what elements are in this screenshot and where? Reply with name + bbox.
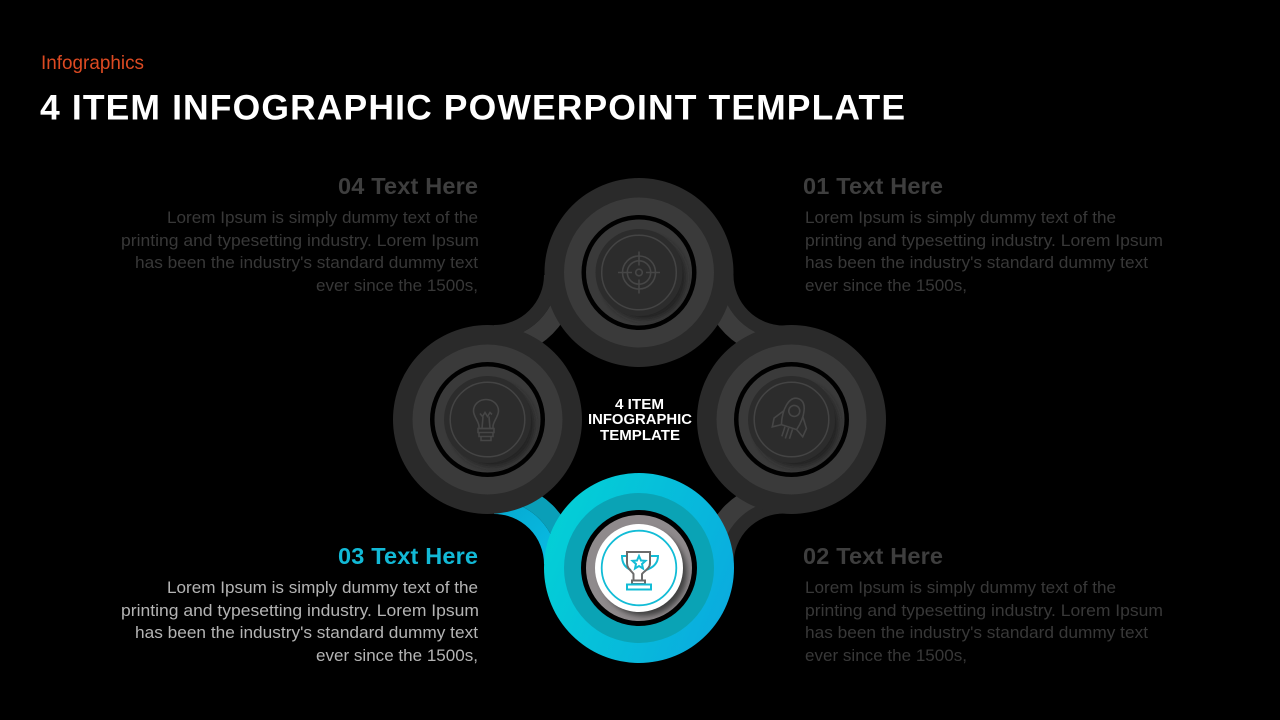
text block 02: printing and typesetting industry. Lorem Ipsum <box>805 601 1163 620</box>
text block 01: printing and typesetting industry. Lorem Ipsum <box>805 231 1163 250</box>
centre label <box>588 397 693 444</box>
connector: top to right <box>710 275 784 348</box>
connector: left to bottom (highlighted) <box>494 490 568 564</box>
node 03: trophy (active) <box>544 473 734 663</box>
text block 03 (active): has been the industry's standard dummy text <box>135 623 478 642</box>
text block 02: has been the industry's standard dummy text <box>805 623 1148 642</box>
centre label: INFOGRAPHIC <box>588 412 693 428</box>
text block 04 <box>121 173 479 295</box>
icon: light bulb <box>474 400 498 440</box>
icon: trophy <box>622 552 658 590</box>
text block 04: Lorem Ipsum is simply dummy text of the <box>167 208 478 227</box>
text block 04: ever since the 1500s, <box>316 276 478 295</box>
text block 01: has been the industry's standard dummy text <box>805 253 1148 272</box>
centre label: TEMPLATE <box>600 428 680 444</box>
text block 03 (active): Lorem Ipsum is simply dummy text of the <box>167 578 478 597</box>
node 02: rocket <box>697 325 886 514</box>
connector: top to left <box>494 275 568 348</box>
text block 03 (active): printing and typesetting industry. Lorem Ipsum <box>121 601 479 620</box>
text block 03 (active): ever since the 1500s, <box>316 646 478 665</box>
text block 02: 02 Text Here <box>803 543 943 569</box>
eyebrow label: Infographics <box>41 52 144 74</box>
text block 02 <box>803 543 1163 665</box>
text block 01: 01 Text Here <box>803 173 943 199</box>
centre label: 4 ITEM <box>615 397 664 413</box>
text block 04: 04 Text Here <box>338 173 478 199</box>
text block 01: Lorem Ipsum is simply dummy text of the <box>805 208 1116 227</box>
icon: target <box>618 252 660 294</box>
node 01: target <box>544 178 734 367</box>
text block 02: Lorem Ipsum is simply dummy text of the <box>805 578 1116 597</box>
node 04: bulb <box>393 325 582 514</box>
title: 4 ITEM INFOGRAPHIC POWERPOINT TEMPLATE <box>40 88 905 128</box>
text block 01 <box>803 173 1163 295</box>
text block 04: has been the industry's standard dummy text <box>135 253 478 272</box>
icon: rocket <box>769 393 814 444</box>
text block 04: printing and typesetting industry. Lorem Ipsum <box>121 231 479 250</box>
connector: right to bottom <box>710 490 784 564</box>
text block 02: ever since the 1500s, <box>805 646 967 665</box>
text block 03 (active) <box>121 543 479 665</box>
text block 01: ever since the 1500s, <box>805 276 967 295</box>
text block 03 (active): 03 Text Here <box>338 543 478 569</box>
